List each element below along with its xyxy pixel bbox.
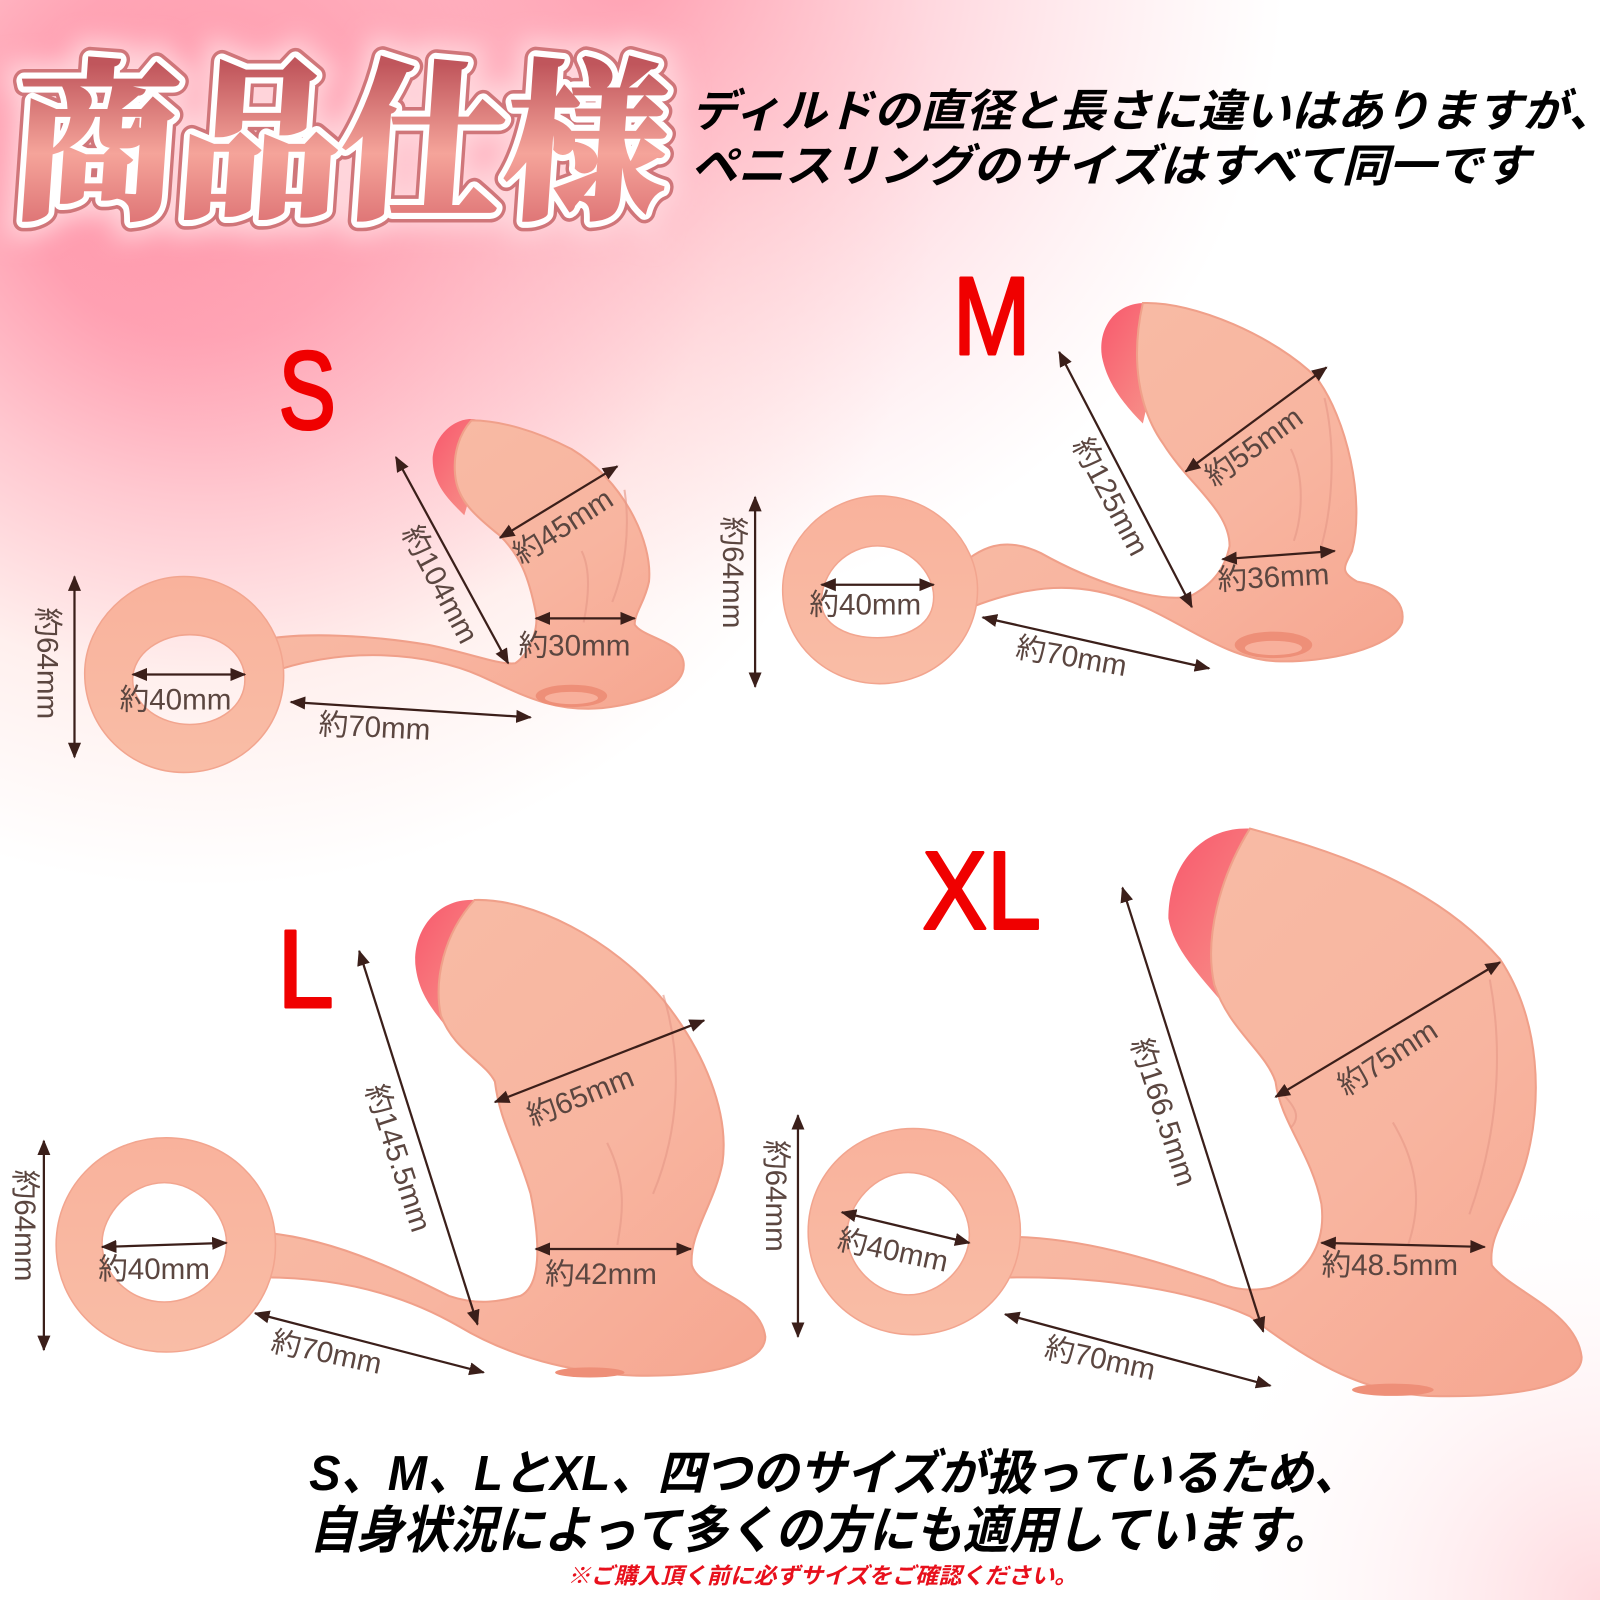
length L: [359, 951, 478, 1324]
product L: [56, 900, 765, 1378]
length S: [395, 457, 508, 663]
title: 商品仕様: [7, 7, 678, 254]
ring height XL: 約64mm: [759, 1140, 792, 1252]
title: 商品仕様: [7, 7, 678, 254]
width L: 約65mm: [523, 1061, 639, 1133]
ring inner M: 約40mm: [809, 589, 921, 622]
strap L: [255, 1313, 484, 1381]
bottom note: 自身状況によって多くの方にも適用しています。: [309, 1502, 1332, 1559]
product M: [783, 303, 1403, 684]
size label XL: XL: [922, 830, 1041, 953]
ring height L: 約64mm: [8, 1170, 41, 1281]
ring inner L: [98, 1243, 227, 1286]
bottom note: S、M、LとXL、四つのサイズが扱っているため、: [309, 1447, 1360, 1501]
strap S: 約70mm: [318, 708, 431, 747]
base L: 約42mm: [545, 1258, 657, 1291]
width M: [1186, 367, 1327, 493]
base XL: 約48.5mm: [1322, 1249, 1458, 1282]
strap M: [983, 617, 1209, 683]
width XL: [1276, 962, 1500, 1102]
length XL: [1122, 888, 1263, 1332]
ring height M: 約64mm: [716, 517, 749, 628]
size label L: L: [278, 908, 334, 1031]
product XL: [808, 828, 1582, 1396]
width S: 約45mm: [507, 482, 619, 571]
measurements M: [716, 352, 1335, 687]
product S: [85, 419, 684, 772]
width M: 約55mm: [1199, 401, 1309, 493]
ring inner L: 約40mm: [98, 1253, 210, 1286]
length L: 約145.5mm: [359, 1080, 437, 1236]
bottom note: [309, 1447, 1360, 1559]
width L: [495, 1020, 704, 1133]
width XL: 約75mm: [1332, 1014, 1444, 1102]
ring inner S: 約40mm: [120, 684, 231, 717]
header note: [691, 86, 1600, 192]
size label M: M: [953, 255, 1031, 378]
header note: ディルドの直径と長さに違いはありますが、: [691, 86, 1600, 137]
title: 商品仕様: [7, 7, 678, 254]
length M: 約125mm: [1066, 433, 1155, 561]
strap XL: 約70mm: [1042, 1331, 1158, 1387]
measurements XL: [759, 888, 1500, 1387]
base M: 約36mm: [1217, 558, 1330, 597]
measurements L: [8, 951, 704, 1381]
footnote: ※ご購入頂く前に必ずサイズをご確認ください。: [567, 1564, 1078, 1589]
strap XL: [1005, 1314, 1270, 1387]
size label S: S: [279, 330, 336, 453]
ring inner XL: 約40mm: [835, 1223, 951, 1279]
measurements S: [30, 457, 635, 757]
title: 商品仕様: [7, 7, 678, 254]
length XL: 約166.5mm: [1124, 1034, 1203, 1190]
base S: 約30mm: [519, 629, 630, 662]
length S: 約104mm: [395, 520, 484, 649]
strap M: 約70mm: [1014, 631, 1129, 683]
length M: [1059, 352, 1192, 607]
header note: ペニスリングのサイズはすべて同一です: [691, 141, 1535, 192]
strap S: [291, 702, 531, 747]
strap L: 約70mm: [268, 1325, 385, 1381]
ring height S: 約64mm: [30, 607, 63, 719]
